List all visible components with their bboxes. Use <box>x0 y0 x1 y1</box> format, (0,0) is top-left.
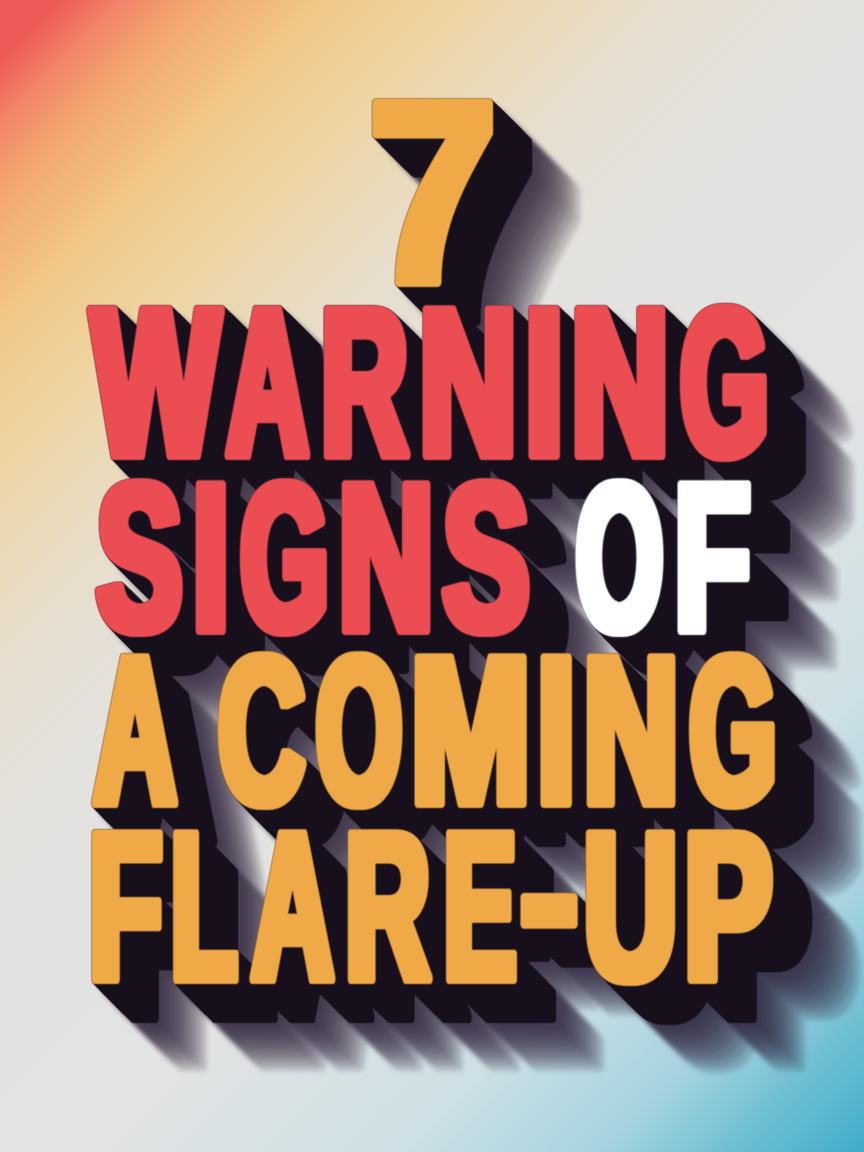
word: FLARE-UP: F <box>89 790 162 1024</box>
word: WARNING: N <box>571 266 669 500</box>
word: SIGNS: I <box>193 442 229 674</box>
word: FLARE-UP: E <box>444 790 516 1024</box>
word: SIGNS: S <box>443 442 529 674</box>
word: SIGNS: G <box>241 442 328 674</box>
word: FLARE-UP: - <box>520 777 578 1010</box>
word: WARNING: G <box>681 266 768 500</box>
word: COMING: C <box>218 614 304 848</box>
word: WARNING: N <box>419 266 517 500</box>
word: FLARE-UP: P <box>684 790 772 1024</box>
word: COMING: O <box>316 614 402 848</box>
word: WARNING: W <box>92 266 220 500</box>
word: FLARE-UP: U <box>584 790 677 1024</box>
word: OF: O <box>576 442 663 674</box>
word: FLARE-UP: L <box>171 790 237 1024</box>
word: COMING: G <box>690 614 776 848</box>
word: WARNING: R <box>321 266 408 500</box>
word: A: A <box>94 614 176 848</box>
word: WARNING: I <box>525 266 563 500</box>
word: FLARE-UP: R <box>346 790 430 1024</box>
word: SIGNS: N <box>339 442 434 674</box>
title: 7 Warning Signs of a Coming Flare-Up <box>89 48 776 1024</box>
word: OF: F <box>675 442 750 674</box>
word: COMING: I <box>537 614 575 848</box>
word: SIGNS: S <box>97 442 182 674</box>
numeral 7: 7 <box>369 48 496 336</box>
word: WARNING: A <box>227 266 308 500</box>
word: COMING: M <box>411 614 530 848</box>
word: FLARE-UP: A <box>252 790 333 1024</box>
word: COMING: N <box>584 614 678 848</box>
